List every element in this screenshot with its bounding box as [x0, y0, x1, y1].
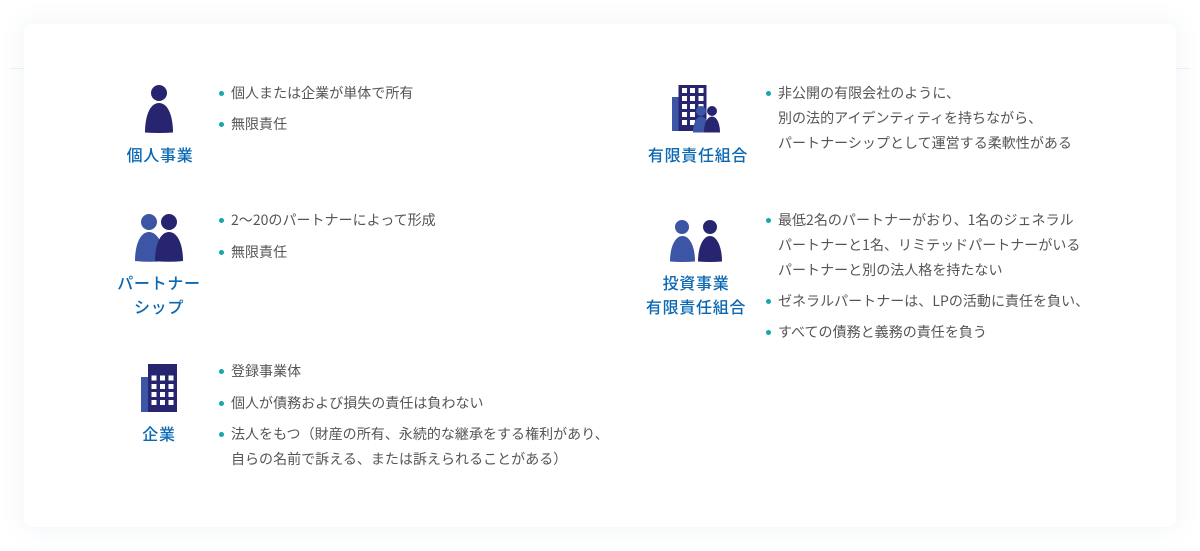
heading: investment limited partnership: 有限責任組合: [646, 294, 746, 318]
text: investment partnership item 1: パートナーと別の法人格を持たない: [778, 260, 1002, 280]
text: investment partnership item 1: [766, 210, 1080, 280]
heading: limited liability partnership: 有限責任組合: [648, 142, 748, 166]
text: partnership item 1: 2〜20のパートナーによって形成: [231, 210, 436, 230]
text: limited liability partnership item: [766, 83, 1072, 153]
text: sole proprietorship item 1: 個人または企業が単体で所有: [231, 83, 413, 103]
text: corporation item 2: 個人が債務および損失の責任は負わない: [231, 393, 484, 413]
heading: partnership: シップ: [134, 294, 184, 318]
heading: investment limited partnership: 投資事業: [663, 270, 729, 294]
text: limited liability partnership item: 非公開の有限会社のように、: [778, 83, 960, 103]
text: corporation item 3: 自らの名前で訴える、または訴えられることがある）: [231, 449, 567, 469]
heading: partnership: パートナー: [117, 270, 201, 294]
heading: partnership: [117, 270, 201, 318]
heading: sole proprietorship: 個人事業: [127, 142, 193, 166]
text: investment partnership item 1: 最低2名のパートナーがおり、1名のジェネラル: [778, 210, 1074, 230]
text: limited liability partnership item: パートナーシップとして運営する柔軟性がある: [778, 133, 1072, 153]
text: partnership item 2: 無限責任: [231, 242, 287, 262]
heading: corporation: 企業: [142, 421, 176, 445]
text: corporation item 3: 法人をもつ（財産の所有、永続的な継承をする権利があり、: [231, 424, 609, 444]
heading: investment limited partnership: [646, 270, 746, 318]
text: investment partnership item 1: パートナーと1名、リミテッドパートナーがいる: [778, 235, 1080, 255]
text: limited liability partnership item: 別の法的アイデンティティを持ちながら、: [778, 108, 1042, 128]
text: corporation item 1: 登録事業体: [231, 361, 301, 381]
text: investment partnership item 3: すべての債務と義務の責任を負う: [778, 322, 987, 342]
text: corporation item 3: [219, 424, 609, 469]
text: investment partnership item 2: ゼネラルパートナーは、LPの活動に責任を負い、: [778, 291, 1089, 311]
text: sole proprietorship item 2: 無限責任: [231, 114, 287, 134]
